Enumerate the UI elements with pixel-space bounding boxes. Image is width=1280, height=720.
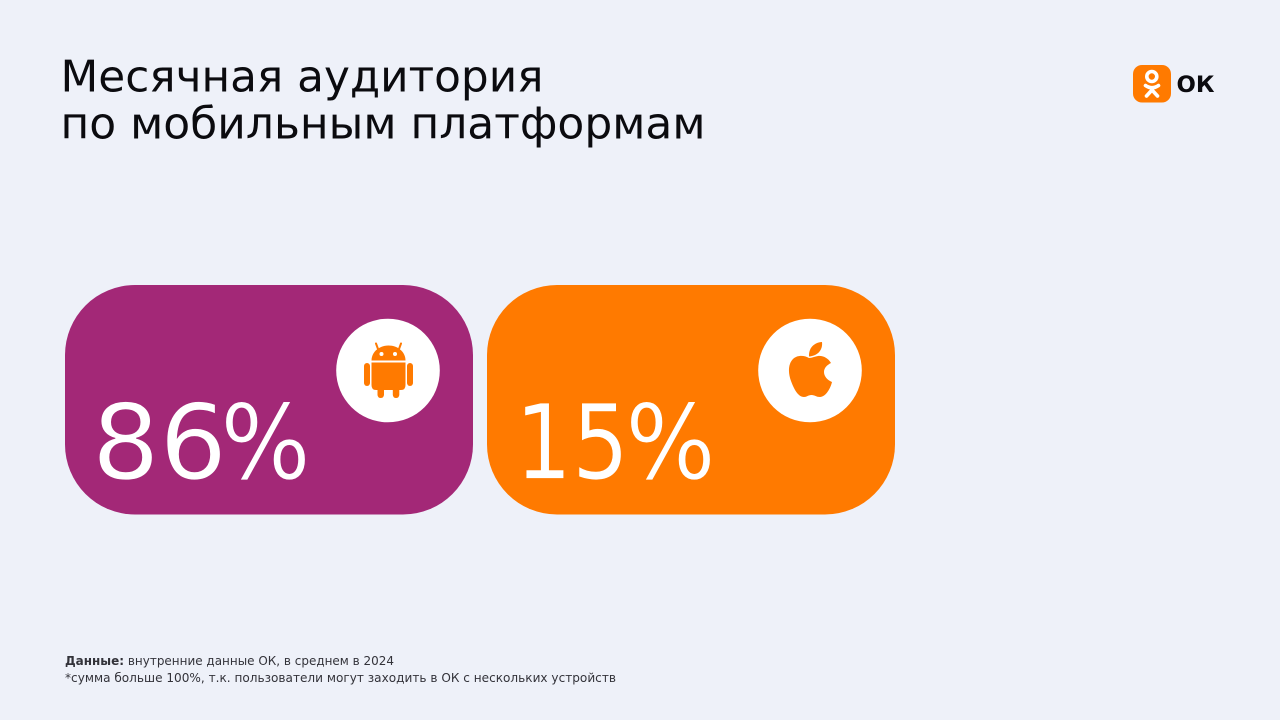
icon: Apple — [758, 319, 862, 422]
stat: 86% — [92, 384, 310, 504]
stat: 86%: 86 — [92, 384, 227, 504]
title: по мобильным платформам — [60, 98, 706, 150]
logo: OK — [1133, 65, 1215, 102]
title — [60, 52, 706, 150]
logo: OK: ОК — [1176, 73, 1215, 98]
data source line: Данные: внутренние данные ОК, в среднем в 2024 — [65, 654, 394, 668]
stat: 15%: % — [626, 384, 716, 504]
panel: Android — [65, 285, 473, 514]
panel: Apple — [487, 285, 895, 514]
stat: 15% — [515, 384, 716, 504]
disclaimer line: *сумма больше 100%, т.к. пользователи могут заходить в ОК с нескольких устройств — [65, 671, 616, 685]
stat: 15%: 15 — [515, 384, 629, 504]
icon: Android — [336, 319, 440, 422]
stat: 86%: % — [220, 384, 310, 504]
footnote — [65, 654, 616, 685]
title: Месячная аудитория — [60, 52, 544, 102]
